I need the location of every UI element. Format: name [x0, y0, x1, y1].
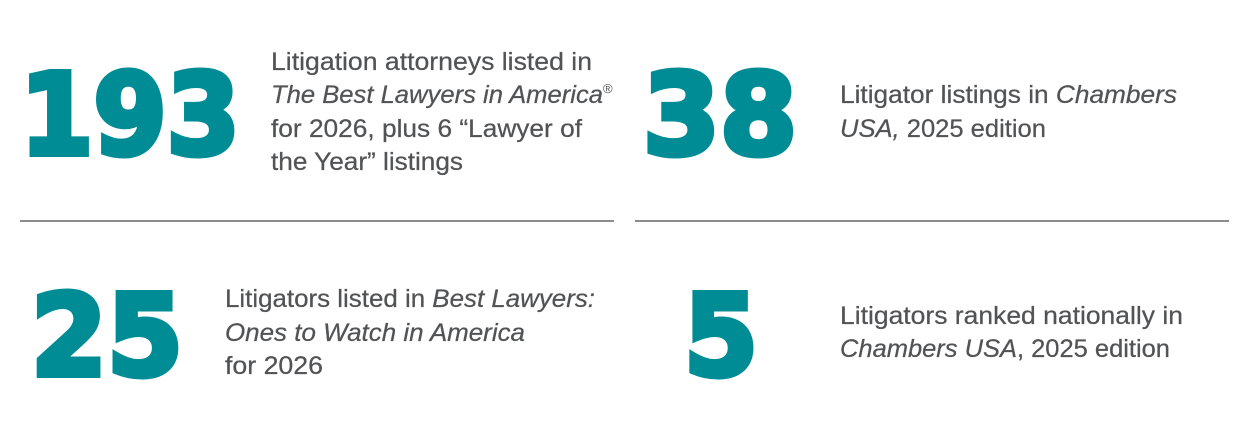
description: 193: for 2026, plus 6 “Lawyer of — [271, 115, 582, 143]
description: 5: Chambers USA, 2025 edition — [840, 335, 1170, 363]
number: 38: 38 — [643, 51, 797, 181]
description: 38: Litigator listings in Chambers — [840, 81, 1177, 109]
panel: 5 litigators — [684, 272, 1183, 402]
divider: right — [635, 220, 1229, 222]
description: 25: Litigators listed in Best Lawyers: — [225, 285, 595, 313]
description: 25: Ones to Watch in America — [225, 319, 525, 347]
description: 193: The Best Lawyers in America — [271, 81, 603, 109]
number: 193: 193 — [20, 51, 240, 181]
description: 193 — [271, 48, 613, 176]
description: 193: Litigation attorneys listed in — [271, 48, 592, 76]
description: 38 — [840, 81, 1177, 143]
description: 5: Litigators ranked nationally in — [840, 302, 1183, 330]
description: 5 — [840, 302, 1183, 363]
panel: 25 litigators — [31, 272, 595, 402]
divider: left — [20, 220, 614, 222]
description: 193: ® — [603, 81, 613, 96]
panel: 193 attorneys — [20, 48, 613, 181]
description: 193: the Year” listings — [271, 148, 463, 176]
description: 25 — [225, 285, 595, 380]
description: 38: USA, 2025 edition — [840, 115, 1046, 143]
panel: 38 listings — [643, 51, 1177, 181]
number: 5: 5 — [684, 272, 758, 402]
description: 25: for 2026 — [225, 352, 323, 380]
number: 25: 25 — [31, 272, 183, 402]
